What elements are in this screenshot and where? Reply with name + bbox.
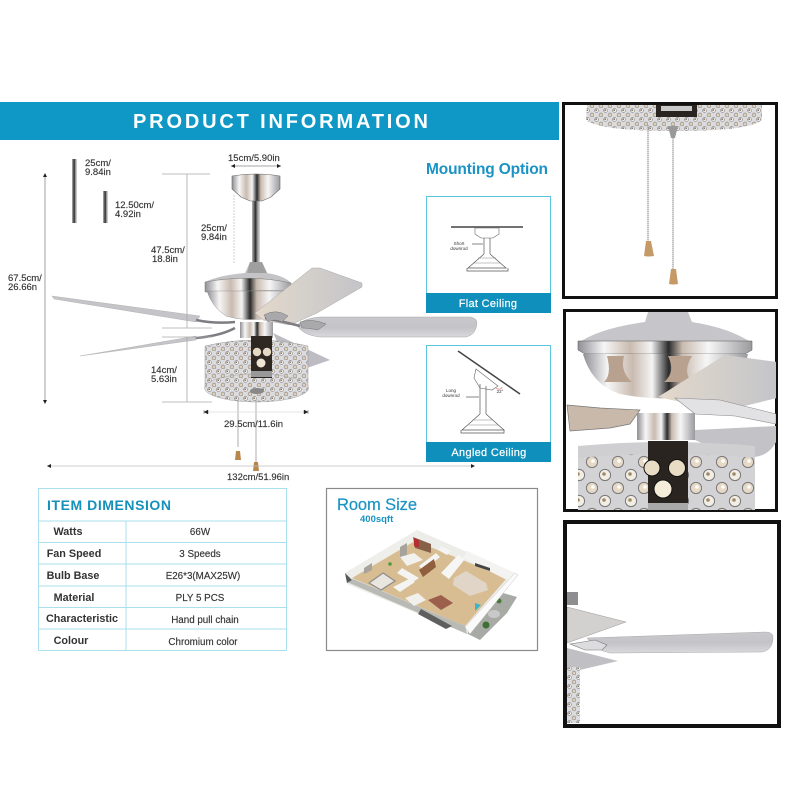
panel: angled ceiling: 22° — [497, 389, 504, 394]
panel: flat ceiling: Flat Ceiling — [459, 298, 517, 310]
panel: flat ceiling — [426, 196, 551, 313]
row: colour — [54, 635, 238, 648]
dimension: extension rods — [72, 158, 154, 223]
dimension: drum width — [204, 410, 308, 430]
left blade arm — [567, 405, 640, 431]
canopy — [232, 174, 280, 201]
lower back blade — [567, 648, 618, 670]
wardrobe — [413, 537, 431, 553]
row: material: Material — [54, 592, 94, 604]
back wall left — [350, 530, 420, 578]
row: bulb base — [47, 570, 240, 582]
panel: room size — [326, 488, 538, 650]
left upper blade — [52, 296, 200, 322]
dimension: extension rods: 25cm/ — [85, 158, 111, 169]
fan product diagram — [52, 174, 477, 471]
row: fan speed — [47, 548, 221, 560]
dimension: total height: 26.66n — [8, 282, 37, 293]
pull knobs — [644, 241, 678, 284]
dimension: extension rods: 9.84in — [85, 167, 111, 178]
panel: angled ceiling: downrod — [442, 393, 460, 398]
back lower blade — [273, 333, 330, 368]
dimension: canopy width: 15cm/5.90in — [228, 153, 280, 164]
dining table — [428, 595, 453, 610]
sofa — [453, 571, 488, 596]
back wall right — [463, 551, 515, 581]
row: bulb base: Bulb Base — [47, 570, 99, 582]
blue chair — [475, 603, 481, 611]
row: fan speed: Fan Speed — [47, 548, 101, 560]
panel: flat ceiling: downrod — [450, 246, 468, 251]
downrod — [252, 200, 260, 263]
upper back blade — [567, 607, 626, 643]
row: watts: Watts — [54, 526, 82, 538]
dimension: extension rods: 4.92in — [115, 209, 141, 220]
row: watts: 66W — [190, 527, 211, 538]
dimension: fan height: 47.5cm/ — [151, 245, 185, 256]
wood floor — [352, 540, 507, 626]
dimension: total height: 67.5cm/ — [8, 273, 42, 284]
panel: angled ceiling: Angled Ceiling — [451, 447, 527, 459]
blade brackets — [264, 312, 326, 330]
dimension: drum height: 5.63in — [151, 374, 177, 385]
dimension: drum height: 14cm/ — [151, 365, 177, 376]
interior walls — [441, 555, 465, 579]
drum bottom — [586, 105, 762, 131]
mounting option heading: Mounting Option — [426, 161, 548, 178]
chrome ring — [578, 341, 752, 354]
right wall — [465, 573, 518, 634]
table heading: ITEM DIMENSION — [47, 497, 171, 513]
balcony — [466, 593, 517, 640]
motor bowl — [207, 291, 290, 320]
panel: angled ceiling — [426, 346, 551, 462]
dimension: downrod: 25cm/ — [201, 223, 227, 234]
row: fan speed: 3 Speeds — [179, 549, 221, 560]
pull knobs — [235, 451, 259, 471]
row: material: PLY 5 PCS — [176, 593, 225, 604]
header banner — [0, 102, 559, 140]
row: watts — [54, 526, 211, 538]
outer front edge — [347, 579, 467, 634]
bottom finial — [250, 388, 264, 394]
kitchen counter — [418, 609, 452, 629]
plant — [388, 562, 392, 566]
crystal drum — [578, 454, 755, 510]
dimension: drum height — [151, 337, 212, 402]
panel: canopy and crystal detail photo — [564, 310, 777, 510]
row: characteristic: Hand pull chain — [171, 615, 239, 626]
lower back blade — [695, 426, 777, 457]
bowl — [583, 354, 748, 398]
panel: room size: Room Size — [337, 496, 417, 514]
blade arms — [196, 318, 300, 338]
panel: room size: 400sqft — [360, 514, 394, 525]
hub fragment — [567, 592, 578, 605]
dome — [582, 312, 748, 341]
dimension: fan height: 18.8in — [152, 254, 178, 265]
bedroom bed small — [405, 593, 426, 606]
motor dome — [205, 262, 291, 288]
row: characteristic — [46, 613, 239, 626]
blade bracket — [570, 640, 607, 650]
right long blade — [297, 317, 477, 337]
finial — [668, 126, 678, 138]
panel: angled ceiling: Long — [446, 388, 457, 393]
blade bracket — [675, 398, 776, 424]
row: colour: Colour — [54, 635, 89, 647]
panel: pull chain photo — [564, 104, 776, 298]
hub — [637, 413, 695, 440]
drum edge — [567, 667, 580, 723]
dimension: downrod: 9.84in — [201, 232, 227, 243]
dimension: blade span — [47, 464, 475, 483]
hub — [240, 322, 273, 338]
front blade — [658, 356, 776, 406]
dimension: blade span: 132cm/51.96in — [227, 472, 289, 483]
dimension: total height — [8, 173, 47, 404]
dimension: extension rods: 12.50cm/ — [115, 200, 154, 211]
dimension: fan height — [151, 174, 212, 328]
wall art — [364, 543, 407, 574]
left lower blade — [80, 336, 196, 356]
dimension: drum width: 29.5cm/11.6in — [224, 419, 283, 430]
black column — [648, 441, 688, 503]
floor plan illustration — [345, 530, 518, 640]
chains — [648, 125, 673, 269]
bedroom bed top — [400, 553, 423, 566]
header banner: PRODUCT INFORMATION — [133, 111, 428, 133]
black center column — [251, 336, 272, 378]
row: colour: Chromium color — [168, 637, 238, 648]
row: characteristic: Characteristic — [46, 613, 118, 625]
pull chains — [238, 400, 256, 462]
panel: item dimension table — [38, 488, 286, 651]
crystal drum — [205, 340, 308, 388]
panel: flat ceiling: Short — [454, 241, 465, 246]
base slab — [345, 530, 515, 634]
motor ring — [205, 278, 291, 292]
bedroom bed left — [369, 573, 395, 590]
long blade — [587, 632, 773, 653]
panel: blade detail photo — [565, 522, 779, 726]
front upper blade — [255, 268, 362, 325]
row: material — [54, 592, 225, 604]
row: bulb base: E26*3(MAX25W) — [166, 571, 240, 582]
dimension: downrod — [201, 195, 234, 263]
